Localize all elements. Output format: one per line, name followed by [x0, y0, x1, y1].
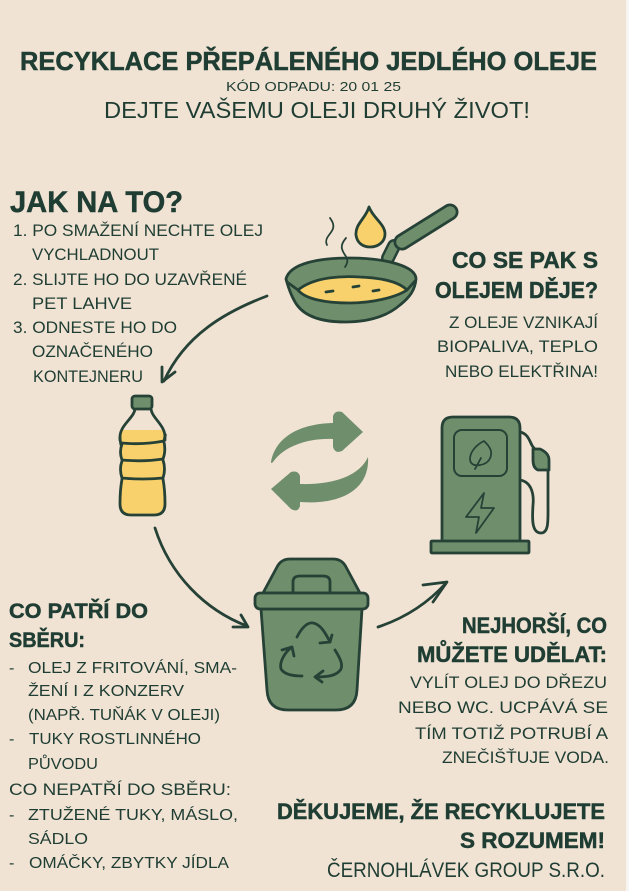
- icon: recycling bin: [255, 559, 368, 710]
- list: what does not belong: OMÁČKY, ZBYTKY JÍDLA: [29, 853, 229, 872]
- heading: how to: JAK NA TO?: [10, 186, 183, 219]
- closing thanks: S ROZUMEM!: [460, 828, 605, 853]
- text: what happens next: NEBO ELEKTŘINA!: [445, 362, 598, 381]
- heading: the worst thing: NEJHORŠÍ, CO: [462, 613, 607, 638]
- heading: what happens next: OLEJEM DĚJE?: [435, 276, 598, 303]
- list: what belongs: ŽENÍ I Z KONZERV: [28, 681, 184, 700]
- arrow: pan to bottle: [162, 296, 267, 382]
- heading: what happens next: CO SE PAK S: [452, 247, 598, 273]
- list: what belongs: (NAPŘ. TUŇÁK V OLEJI): [28, 705, 220, 724]
- list: what belongs: OLEJ Z FRITOVÁNÍ, SMA-: [28, 658, 237, 677]
- list: what belongs: TUKY ROSTLINNÉHO: [29, 729, 201, 748]
- heading: what belongs: SBĚRU:: [9, 628, 85, 652]
- text: what happens next: Z OLEJE VZNIKAJÍ: [449, 313, 598, 332]
- icon: oil bottle: [120, 396, 165, 515]
- text: what happens next: [437, 313, 598, 381]
- text: what happens next: BIOPALIVA, TEPLO: [437, 337, 598, 356]
- list: what belongs: -: [9, 660, 14, 677]
- list: what does not belong: -: [9, 807, 14, 824]
- subtitle: DEJTE VAŠEMU OLEJI DRUHÝ ŽIVOT!: [104, 96, 530, 123]
- list: what belongs: PŮVODU: [28, 754, 98, 773]
- icon: fuel pump: [431, 417, 549, 553]
- heading: what belongs: CO PATŘÍ DO: [9, 599, 148, 623]
- steps list: KONTEJNERU: [33, 367, 143, 386]
- list: what does not belong: [9, 805, 238, 872]
- list: what does not belong: SÁDLO: [28, 829, 88, 848]
- company name: ČERNOHLÁVEK GROUP S.R.O.: [327, 859, 605, 882]
- heading: the worst thing: [417, 613, 607, 667]
- steps list: OZNAČENÉHO: [32, 342, 153, 361]
- icon: frying pan with oil: [286, 207, 450, 322]
- arrow: bin to pump: [378, 582, 447, 627]
- list: what belongs: [9, 658, 237, 773]
- text: the worst thing: ZNEČIŠŤUJE VODA.: [442, 748, 609, 767]
- waste code: KÓD ODPADU: 20 01 25: [226, 79, 401, 94]
- steps list: [13, 221, 263, 386]
- steps list: PET LAHVE: [32, 294, 132, 313]
- text: the worst thing: VYLÍT OLEJ DO DŘEZU: [410, 673, 607, 692]
- list: what does not belong: ZTUŽENÉ TUKY, MÁSLO,: [28, 805, 238, 824]
- list: what belongs: -: [9, 731, 14, 748]
- icon: cycle arrows: [271, 412, 368, 510]
- heading: what does not belong: CO NEPATŘÍ DO SBĚRU:: [9, 780, 231, 799]
- text: the worst thing: NEBO WC. UCPÁVÁ SE: [398, 698, 608, 717]
- steps list: VYCHLADNOUT: [32, 245, 159, 264]
- list: what does not belong: -: [9, 855, 14, 872]
- heading: what belongs: [9, 599, 148, 652]
- closing thanks: [277, 799, 605, 853]
- steps list: 3. ODNESTE HO DO: [13, 318, 177, 337]
- text: the worst thing: [398, 673, 609, 767]
- steps list: 1. PO SMAŽENÍ NECHTE OLEJ: [13, 221, 263, 240]
- heading: what happens next: [435, 247, 598, 303]
- text: the worst thing: TÍM TOTIŽ POTRUBÍ A: [415, 724, 609, 743]
- arrow: bottle to bin: [155, 528, 248, 627]
- steps list: 2. SLIJTE HO DO UZAVŘENÉ: [13, 270, 247, 289]
- title: RECYKLACE PŘEPÁLENÉHO JEDLÉHO OLEJE: [20, 46, 597, 76]
- heading: the worst thing: MŮŽETE UDĚLAT:: [417, 639, 607, 667]
- closing thanks: DĚKUJEME, ŽE RECYKLUJETE: [277, 799, 605, 824]
